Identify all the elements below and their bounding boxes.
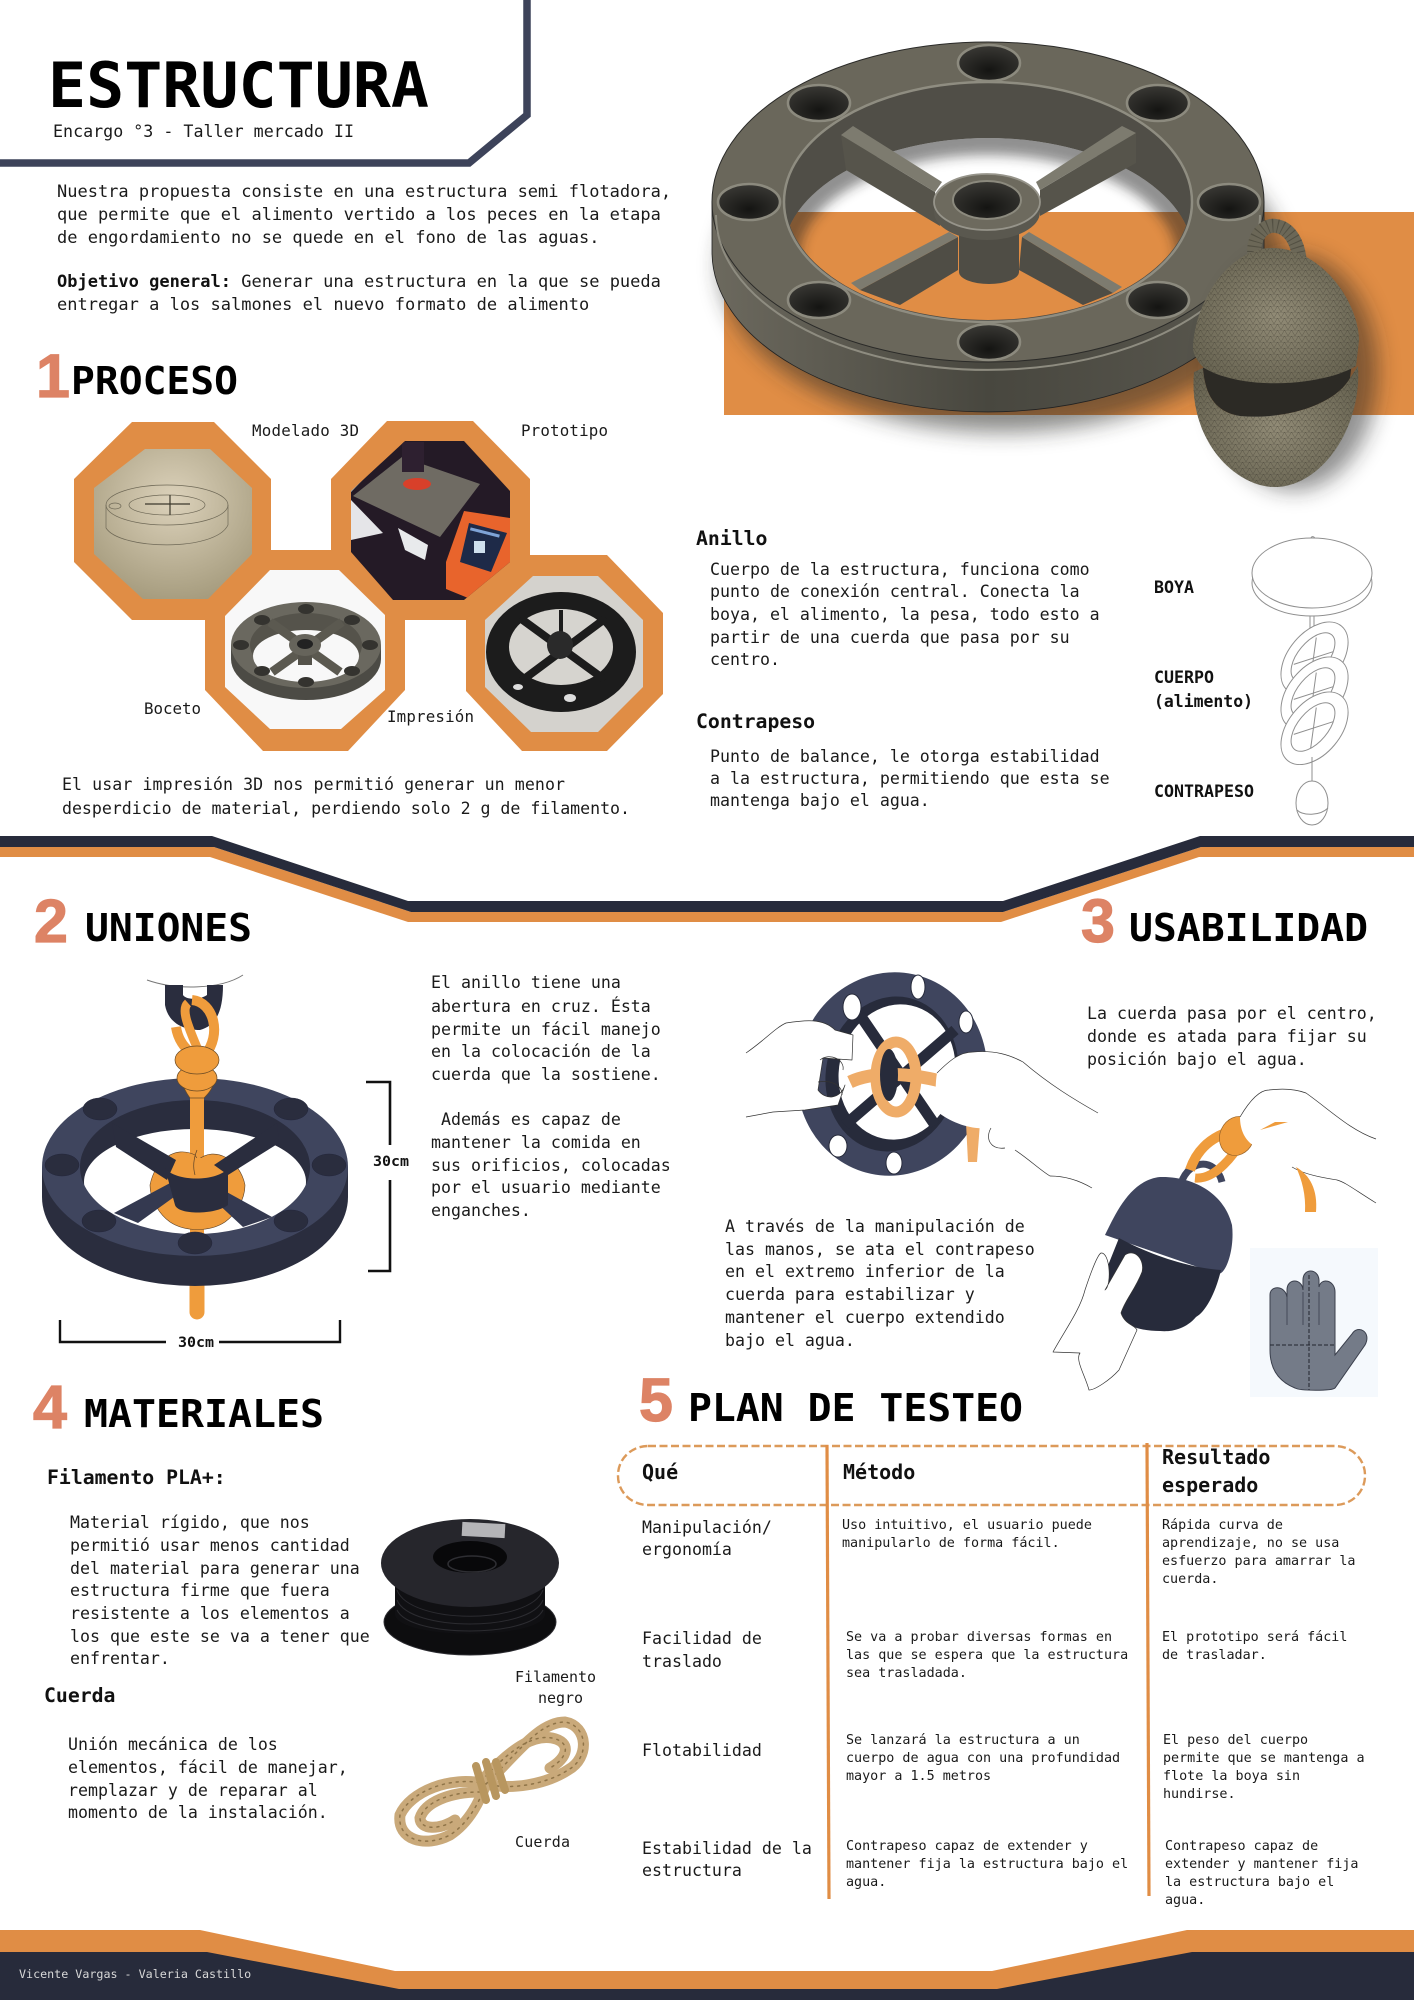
table headers: Resultado <box>1162 1445 1270 1469</box>
table row: estabilidad: agua. <box>1165 1893 1205 1908</box>
table row: estabilidad: mantener fija la estructura bajo el <box>846 1857 1128 1872</box>
filament spool image <box>381 1519 559 1655</box>
table row: traslado: Se va a probar diversas formas en <box>846 1630 1112 1645</box>
usability text bottom: mantener el cuerpo extendido <box>725 1308 1005 1327</box>
intro text: Objetivo general: Generar una estructura en la que se pueda <box>57 272 661 292</box>
unions text: El anillo tiene una <box>431 973 621 992</box>
cuerda text: remplazar y de reparar al <box>68 1781 318 1800</box>
filament text: los que este se va a tener que <box>70 1627 370 1646</box>
exploded diagram labels: BOYA <box>1154 578 1194 597</box>
footer band <box>0 1930 1414 2000</box>
unions text: permite un fácil manejo <box>431 1020 661 1039</box>
usability text top: donde es atada para fijar su <box>1087 1027 1367 1046</box>
exploded diagram labels <box>1154 578 1254 801</box>
heading: plan de testeo: 5 <box>639 1366 673 1434</box>
usability text bottom: cuerda para estabilizar y <box>725 1285 975 1304</box>
icon: hand size diagram <box>1250 1248 1378 1397</box>
unions text: por el usuario mediante <box>431 1178 661 1197</box>
filament text: resistente a los elementos a <box>70 1604 350 1623</box>
contrapeso text: Contrapeso <box>696 710 815 733</box>
orange backdrop panel <box>724 212 1414 415</box>
anillo text: Anillo <box>696 527 767 550</box>
filament text: Filamento PLA+: <box>47 1466 226 1489</box>
table row: traslado: Facilidad de <box>642 1629 762 1648</box>
photo: printed ring <box>485 576 643 732</box>
octagon frames <box>74 421 663 751</box>
filament caption: Filamento <box>515 1668 596 1686</box>
unions ring illustration <box>42 975 348 1312</box>
usability text top <box>1087 1004 1377 1069</box>
heading: usabilidad: USABILIDAD <box>1129 906 1368 951</box>
dimension: width 30cm: 30cm <box>178 1335 214 1351</box>
unions text: Además es capaz de <box>441 1110 621 1129</box>
table row: estabilidad: extender y mantener fija <box>1165 1857 1358 1872</box>
hero ring 3D render <box>712 42 1284 432</box>
contrapeso text: Punto de balance, le otorga estabilidad <box>710 747 1100 766</box>
table row: manipulacion: esfuerzo para amarrar la <box>1162 1554 1355 1569</box>
heading: plan de testeo <box>639 1366 1023 1434</box>
filament caption <box>515 1668 596 1707</box>
table row: manipulacion: manipularlo de forma fácil. <box>842 1535 1060 1551</box>
exploded diagram labels: CONTRAPESO <box>1154 782 1254 801</box>
heading: usabilidad: 3 <box>1081 887 1115 955</box>
heading: uniones: 2 <box>34 887 68 955</box>
usability text bottom: las manos, se ata el contrapeso <box>725 1240 1035 1259</box>
anillo text: Cuerpo de la estructura, funciona como <box>710 560 1090 579</box>
table row: traslado: traslado <box>642 1652 722 1671</box>
anillo text: centro. <box>710 650 780 669</box>
table row: estabilidad: la estructura bajo el <box>1165 1875 1334 1890</box>
table row: flotabilidad: Flotabilidad <box>642 1741 762 1760</box>
process paragraph <box>62 775 630 818</box>
cuerda text: Unión mecánica de los <box>68 1735 278 1754</box>
exploded diagram labels: (alimento) <box>1154 692 1253 711</box>
table row: estabilidad: Contrapeso capaz de extender y <box>846 1839 1088 1854</box>
top divider band <box>0 836 1414 922</box>
contrapeso text: mantenga bajo el agua. <box>710 791 930 810</box>
contrapeso text: a la estructura, permitiendo que esta se <box>710 769 1110 788</box>
table row: flotabilidad <box>642 1732 1365 1802</box>
footer credits: Vicente Vargas - Valeria Castillo <box>19 1967 251 1981</box>
table row: manipulacion: Manipulación/ <box>642 1518 772 1537</box>
hands tying rope on ring <box>746 954 1098 1194</box>
dimension: height 30cm: 30cm <box>373 1154 409 1170</box>
contrapeso text <box>696 710 1110 810</box>
process labels <box>144 421 608 726</box>
anillo text: partir de una cuerda que pasa por su <box>710 628 1070 647</box>
process labels: Modelado 3D <box>252 421 359 440</box>
usability text bottom: A través de la manipulación de <box>725 1217 1025 1236</box>
table headers <box>642 1445 1270 1497</box>
table row: manipulacion: ergonomía <box>642 1540 732 1559</box>
hero buoy render <box>1193 226 1378 490</box>
process labels: Impresión <box>387 707 474 726</box>
table row: flotabilidad: mayor a 1.5 metros <box>846 1769 991 1784</box>
photo: boceto sketch <box>90 445 256 603</box>
table row: estabilidad <box>642 1839 1358 1908</box>
cuerda text: momento de la instalación. <box>68 1803 328 1822</box>
anillo text <box>696 527 1100 669</box>
table row: traslado <box>642 1629 1347 1681</box>
unions text: enganches. <box>431 1201 531 1220</box>
heading: materiales <box>33 1373 324 1441</box>
filament caption: negro <box>538 1689 583 1707</box>
table row: manipulacion: aprendizaje, no se usa <box>1162 1536 1339 1551</box>
dimension: width 30cm <box>60 1320 340 1351</box>
filament text: Material rígido, que nos <box>70 1513 310 1532</box>
table row: flotabilidad: Se lanzará la estructura a un <box>846 1732 1080 1748</box>
table row: manipulacion <box>642 1517 1355 1587</box>
rope caption: Cuerda <box>515 1833 570 1851</box>
table row: manipulacion: Uso intuitivo, el usuario puede <box>842 1518 1092 1533</box>
table row: flotabilidad: flote la boya sin <box>1163 1769 1300 1784</box>
table headers: Qué <box>642 1460 678 1484</box>
cuerda text <box>44 1684 348 1822</box>
unions text: cuerda que la sostiene. <box>431 1065 661 1084</box>
table row: flotabilidad: cuerpo de agua con una profundidad <box>846 1751 1120 1766</box>
usability text top: posición bajo el agua. <box>1087 1050 1307 1069</box>
process labels: Boceto <box>144 699 201 718</box>
filament text: del material para generar una <box>70 1559 360 1578</box>
subtitle: Encargo °3 - Taller mercado II <box>53 122 354 141</box>
rope image <box>400 1722 583 1841</box>
table row: traslado: sea trasladada. <box>846 1666 967 1681</box>
intro text: que permite que el alimento vertido a los peces en la etapa <box>57 205 661 225</box>
unions text: en la colocación de la <box>431 1042 651 1061</box>
usability text bottom: bajo el agua. <box>725 1331 855 1350</box>
table row: traslado: las que se espera que la estructura <box>846 1648 1128 1663</box>
table row: estabilidad: Contrapeso capaz de <box>1165 1839 1318 1854</box>
table row: flotabilidad: El peso del cuerpo <box>1163 1733 1308 1748</box>
filament text: permitió usar menos cantidad <box>70 1536 350 1555</box>
table row: estabilidad: agua. <box>846 1875 886 1890</box>
table row: estabilidad: Estabilidad de la <box>642 1839 812 1858</box>
process paragraph: El usar impresión 3D nos permitió generar un menor <box>62 775 565 794</box>
render: 3D model ring <box>225 570 385 729</box>
heading: proceso: PROCESO <box>71 359 238 404</box>
filament text: estructura firme que fuera <box>70 1581 330 1600</box>
heading: usabilidad <box>1081 887 1368 955</box>
unions text: mantener la comida en <box>431 1133 641 1152</box>
intro text: de engordamiento no se quede en el fono de las aguas. <box>57 228 599 248</box>
cuerda text: Cuerda <box>44 1684 115 1707</box>
hands tying counterweight <box>1053 1089 1376 1390</box>
unions text <box>431 973 671 1220</box>
filament text <box>47 1466 370 1668</box>
dimension: height 30cm <box>366 1082 409 1271</box>
anillo text: punto de conexión central. Conecta la <box>710 582 1080 601</box>
usability text top: La cuerda pasa por el centro, <box>1087 1004 1377 1023</box>
usability text bottom: en el extremo inferior de la <box>725 1262 1005 1281</box>
unions text: sus orificios, colocadas <box>431 1156 671 1175</box>
table headers: esperado <box>1162 1473 1258 1497</box>
filament text: enfrentar. <box>70 1649 170 1668</box>
process labels: Prototipo <box>521 421 608 440</box>
usability text bottom <box>725 1217 1035 1350</box>
heading: materiales: 4 <box>33 1373 67 1441</box>
heading: proceso: 1 <box>36 342 70 410</box>
table row: estabilidad: estructura <box>642 1861 742 1880</box>
anillo text: boya, el alimento, la pesa, todo esto a <box>710 605 1100 624</box>
intro text <box>57 182 671 315</box>
table row: manipulacion: cuerda. <box>1162 1572 1218 1587</box>
heading: proceso <box>36 342 238 410</box>
header frame <box>0 0 527 163</box>
table column rules <box>827 1443 1149 1899</box>
unions text: abertura en cruz. Ésta <box>431 997 651 1016</box>
intro text: entregar a los salmones el nuevo formato de alimento <box>57 295 589 315</box>
exploded diagram labels: CUERPO <box>1154 668 1214 687</box>
title: ESTRUCTURA <box>48 49 429 122</box>
intro text: Nuestra propuesta consiste en una estructura semi flotadora, <box>57 182 671 202</box>
heading: uniones <box>34 887 252 955</box>
exploded diagram drawing <box>1252 537 1372 825</box>
process paragraph: desperdicio de material, perdiendo solo 2 g de filamento. <box>62 799 630 818</box>
table headers: Método <box>843 1460 915 1484</box>
heading: uniones: UNIONES <box>85 906 252 951</box>
table row: flotabilidad: hundirse. <box>1163 1787 1236 1802</box>
heading: plan de testeo: PLAN DE TESTEO <box>688 1386 1023 1431</box>
cuerda text: elementos, fácil de manejar, <box>68 1758 348 1777</box>
table row: manipulacion: Rápida curva de <box>1162 1517 1283 1533</box>
table row: traslado: El prototipo será fácil <box>1162 1629 1347 1645</box>
heading: materiales: MATERIALES <box>84 1392 324 1437</box>
photo: 3D printer prototype <box>351 441 510 600</box>
table row: flotabilidad: permite que se mantenga a <box>1163 1751 1365 1766</box>
table header outline <box>618 1446 1365 1505</box>
table row: traslado: de trasladar. <box>1162 1648 1267 1663</box>
